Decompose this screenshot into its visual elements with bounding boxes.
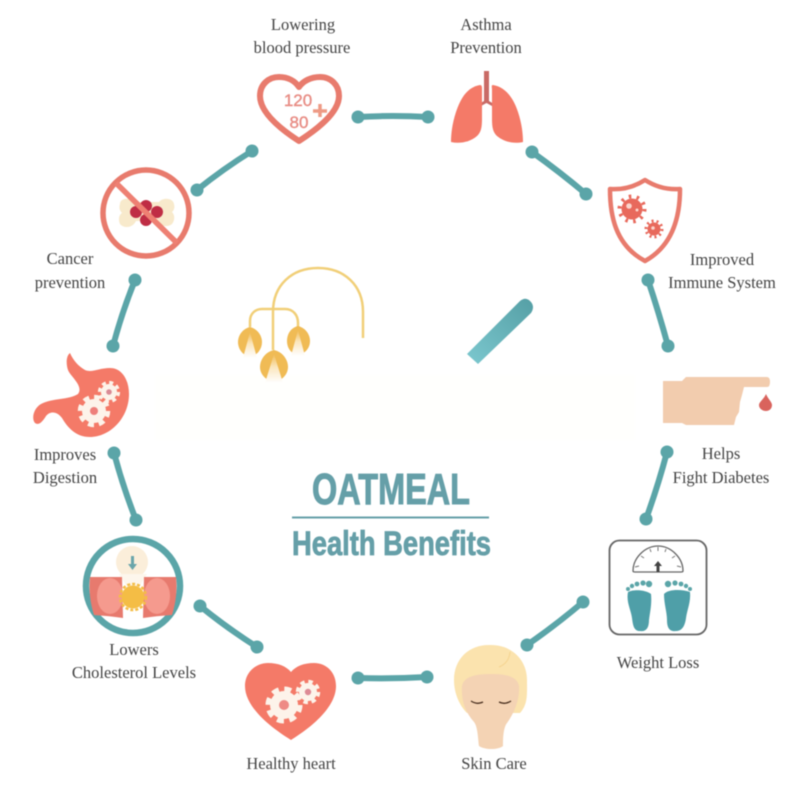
label: improved immune system xyxy=(668,250,776,292)
connector: cancer to blood pressure xyxy=(190,144,258,196)
connector: digestion to cancer xyxy=(106,274,142,352)
icon: oat sprig xyxy=(238,268,363,383)
label: helps fight diabetes xyxy=(673,444,769,487)
label: improved immune system: Immune System xyxy=(668,273,776,292)
label: healthy heart: Healthy heart xyxy=(246,754,336,773)
label: improves digestion: Improves xyxy=(34,445,96,464)
icon: heart with blood pressure numbers: 120 xyxy=(284,91,312,110)
label: helps fight diabetes: Helps xyxy=(702,444,740,463)
connector: blood pressure to asthma xyxy=(352,110,434,124)
icon: heart with blood pressure numbers: 80 xyxy=(290,113,308,132)
icon: cholesterol artery in circle xyxy=(86,539,180,633)
connector: diabetes to weight loss xyxy=(640,446,674,526)
label: asthma prevention xyxy=(450,15,522,57)
label: weight loss: Weight Loss xyxy=(617,653,699,672)
label: cancer prevention: prevention xyxy=(35,273,105,292)
icon: finger with blood drop xyxy=(663,377,772,425)
label: improved immune system: Improved xyxy=(690,250,755,269)
icon: weight scale with feet xyxy=(610,540,706,634)
label: lowering blood pressure xyxy=(254,15,350,57)
label: cancer prevention: Cancer xyxy=(47,249,94,268)
label: improves digestion: Digestion xyxy=(33,468,97,487)
label: lowering blood pressure: blood pressure xyxy=(254,38,350,57)
connector: skin care to healthy heart xyxy=(352,670,434,684)
label: lowering blood pressure: Lowering xyxy=(271,15,335,34)
label: lowers cholesterol levels: Lowers xyxy=(109,640,159,659)
title: Health Benefits xyxy=(292,525,491,563)
label: improves digestion xyxy=(33,445,97,487)
connector: immune system to diabetes xyxy=(642,274,674,352)
icon: stomach with gears xyxy=(33,353,129,437)
label: asthma prevention: Prevention xyxy=(450,38,522,57)
icon: no cancer bone sign xyxy=(103,170,189,256)
connector: asthma to immune system xyxy=(526,146,592,200)
label: lowers cholesterol levels: Cholesterol Levels xyxy=(72,663,196,682)
label: helps fight diabetes: Fight Diabetes xyxy=(673,468,769,487)
icon: spoon handle xyxy=(467,299,533,364)
connector: cholesterol to digestion xyxy=(108,446,142,526)
icon: shield with germs xyxy=(610,180,680,261)
connector: healthy heart to cholesterol xyxy=(194,600,264,654)
icon: lungs xyxy=(451,71,523,143)
icon: face with blonde hair xyxy=(454,645,527,749)
title xyxy=(292,465,491,563)
label: skin care: Skin Care xyxy=(461,754,527,773)
icon: heart with blood pressure numbers xyxy=(260,77,339,141)
label: cancer prevention xyxy=(35,249,105,292)
label: lowers cholesterol levels xyxy=(72,640,196,682)
connector: weight loss to skin care xyxy=(520,596,590,652)
icon: healthy heart with gears xyxy=(245,663,336,740)
label: asthma prevention: Asthma xyxy=(460,15,512,34)
title: OATMEAL xyxy=(312,465,470,514)
